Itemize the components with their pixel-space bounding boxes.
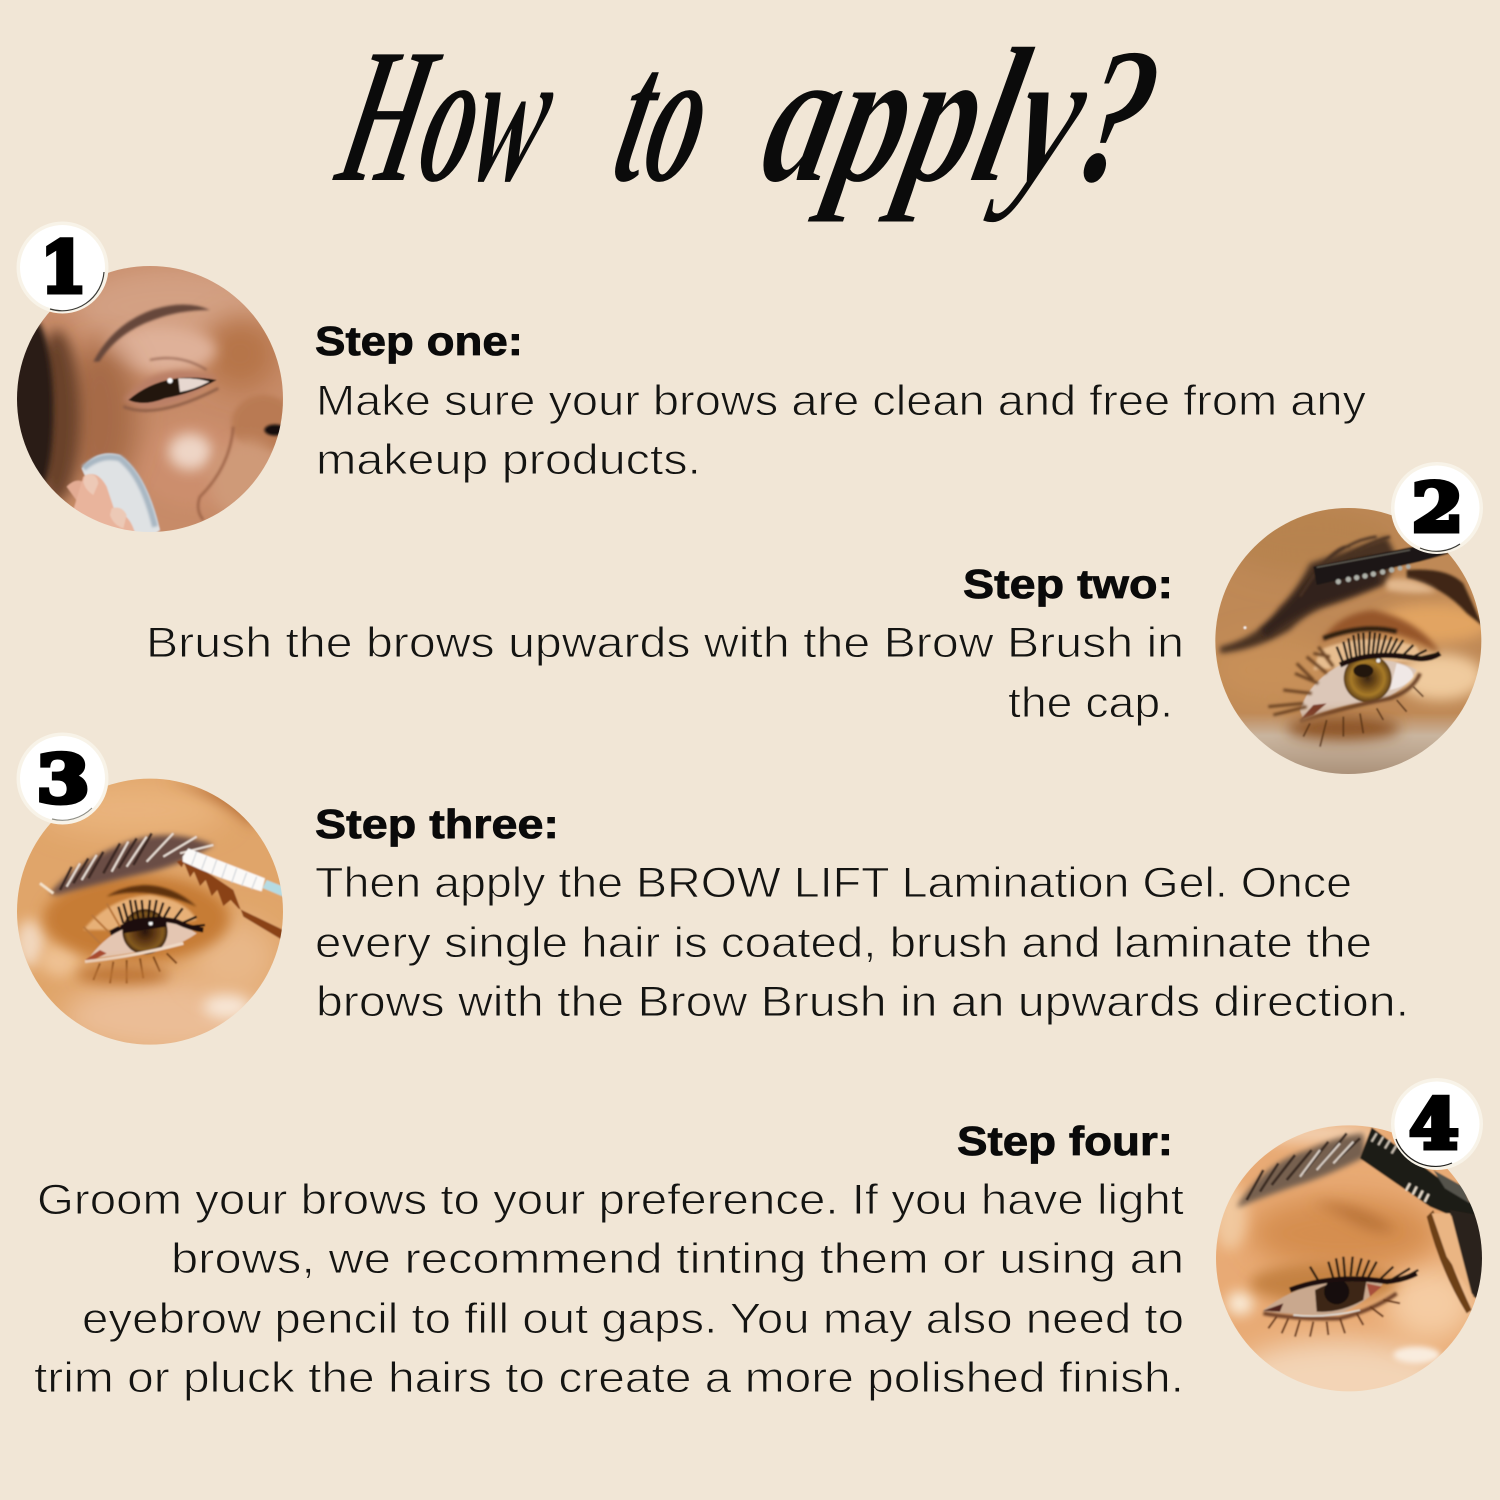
text: step four: Groom your brows to your preference. If you have light (37, 1176, 1184, 1224)
text: step three: brows with the Brow Brush in an upwards direction. (316, 978, 1409, 1026)
text: step two: Brush the brows upwards with the Brow Brush in (146, 619, 1184, 667)
panel: step four (34, 1078, 1487, 1420)
panel: step three (13, 732, 1409, 1053)
text: step two (146, 619, 1184, 727)
badge: number 2: 2 (1412, 469, 1463, 547)
badge: number 3: 3 (37, 740, 89, 818)
badge: number 1: 1 (40, 227, 87, 309)
badge: number 4 (1391, 1078, 1483, 1170)
text: step three: Then apply the BROW LIFT Lamination Gel. Once (315, 859, 1352, 907)
text: step one (316, 377, 1367, 484)
badge: number 3 (16, 732, 108, 824)
text: step one: makeup products. (316, 436, 701, 484)
text: step one: Make sure your brows are clean and free from any (316, 377, 1367, 425)
text: step two: the cap. (1008, 679, 1173, 727)
text: step four: trim or pluck the hairs to create a more polished finish. (34, 1354, 1184, 1402)
title (321, 7, 1178, 223)
badge: number 2 (1391, 462, 1483, 554)
heading: step one: Step one: (315, 318, 523, 364)
photo: grooming the finished brows (1216, 1125, 1482, 1392)
badge: number 4: 4 (1409, 1086, 1459, 1165)
text: step three: every single hair is coated, brush and laminate the (315, 919, 1372, 967)
photo: cleansing the brows with a cotton pad (17, 266, 283, 532)
photo: brushing the brows upwards (1210, 503, 1490, 777)
text: step four: brows, we recommend tinting them or using an (171, 1235, 1184, 1283)
text: step three (315, 859, 1409, 1026)
photo: applying lamination gel with a spoolie (13, 777, 287, 1053)
heading: step two: Step two: (963, 561, 1173, 607)
text: step four: eyebrow pencil to fill out gaps. You may also need to (82, 1295, 1184, 1343)
title: to (598, 7, 732, 223)
text: step four (34, 1176, 1184, 1402)
heading: step three: Step three: (315, 801, 559, 847)
title: apply? (746, 7, 1178, 223)
badge: number 1 (16, 222, 108, 314)
heading: step four: Step four: (957, 1118, 1173, 1164)
title: How (321, 7, 575, 223)
panel: step two (146, 462, 1490, 777)
panel: step one (10, 222, 1367, 540)
